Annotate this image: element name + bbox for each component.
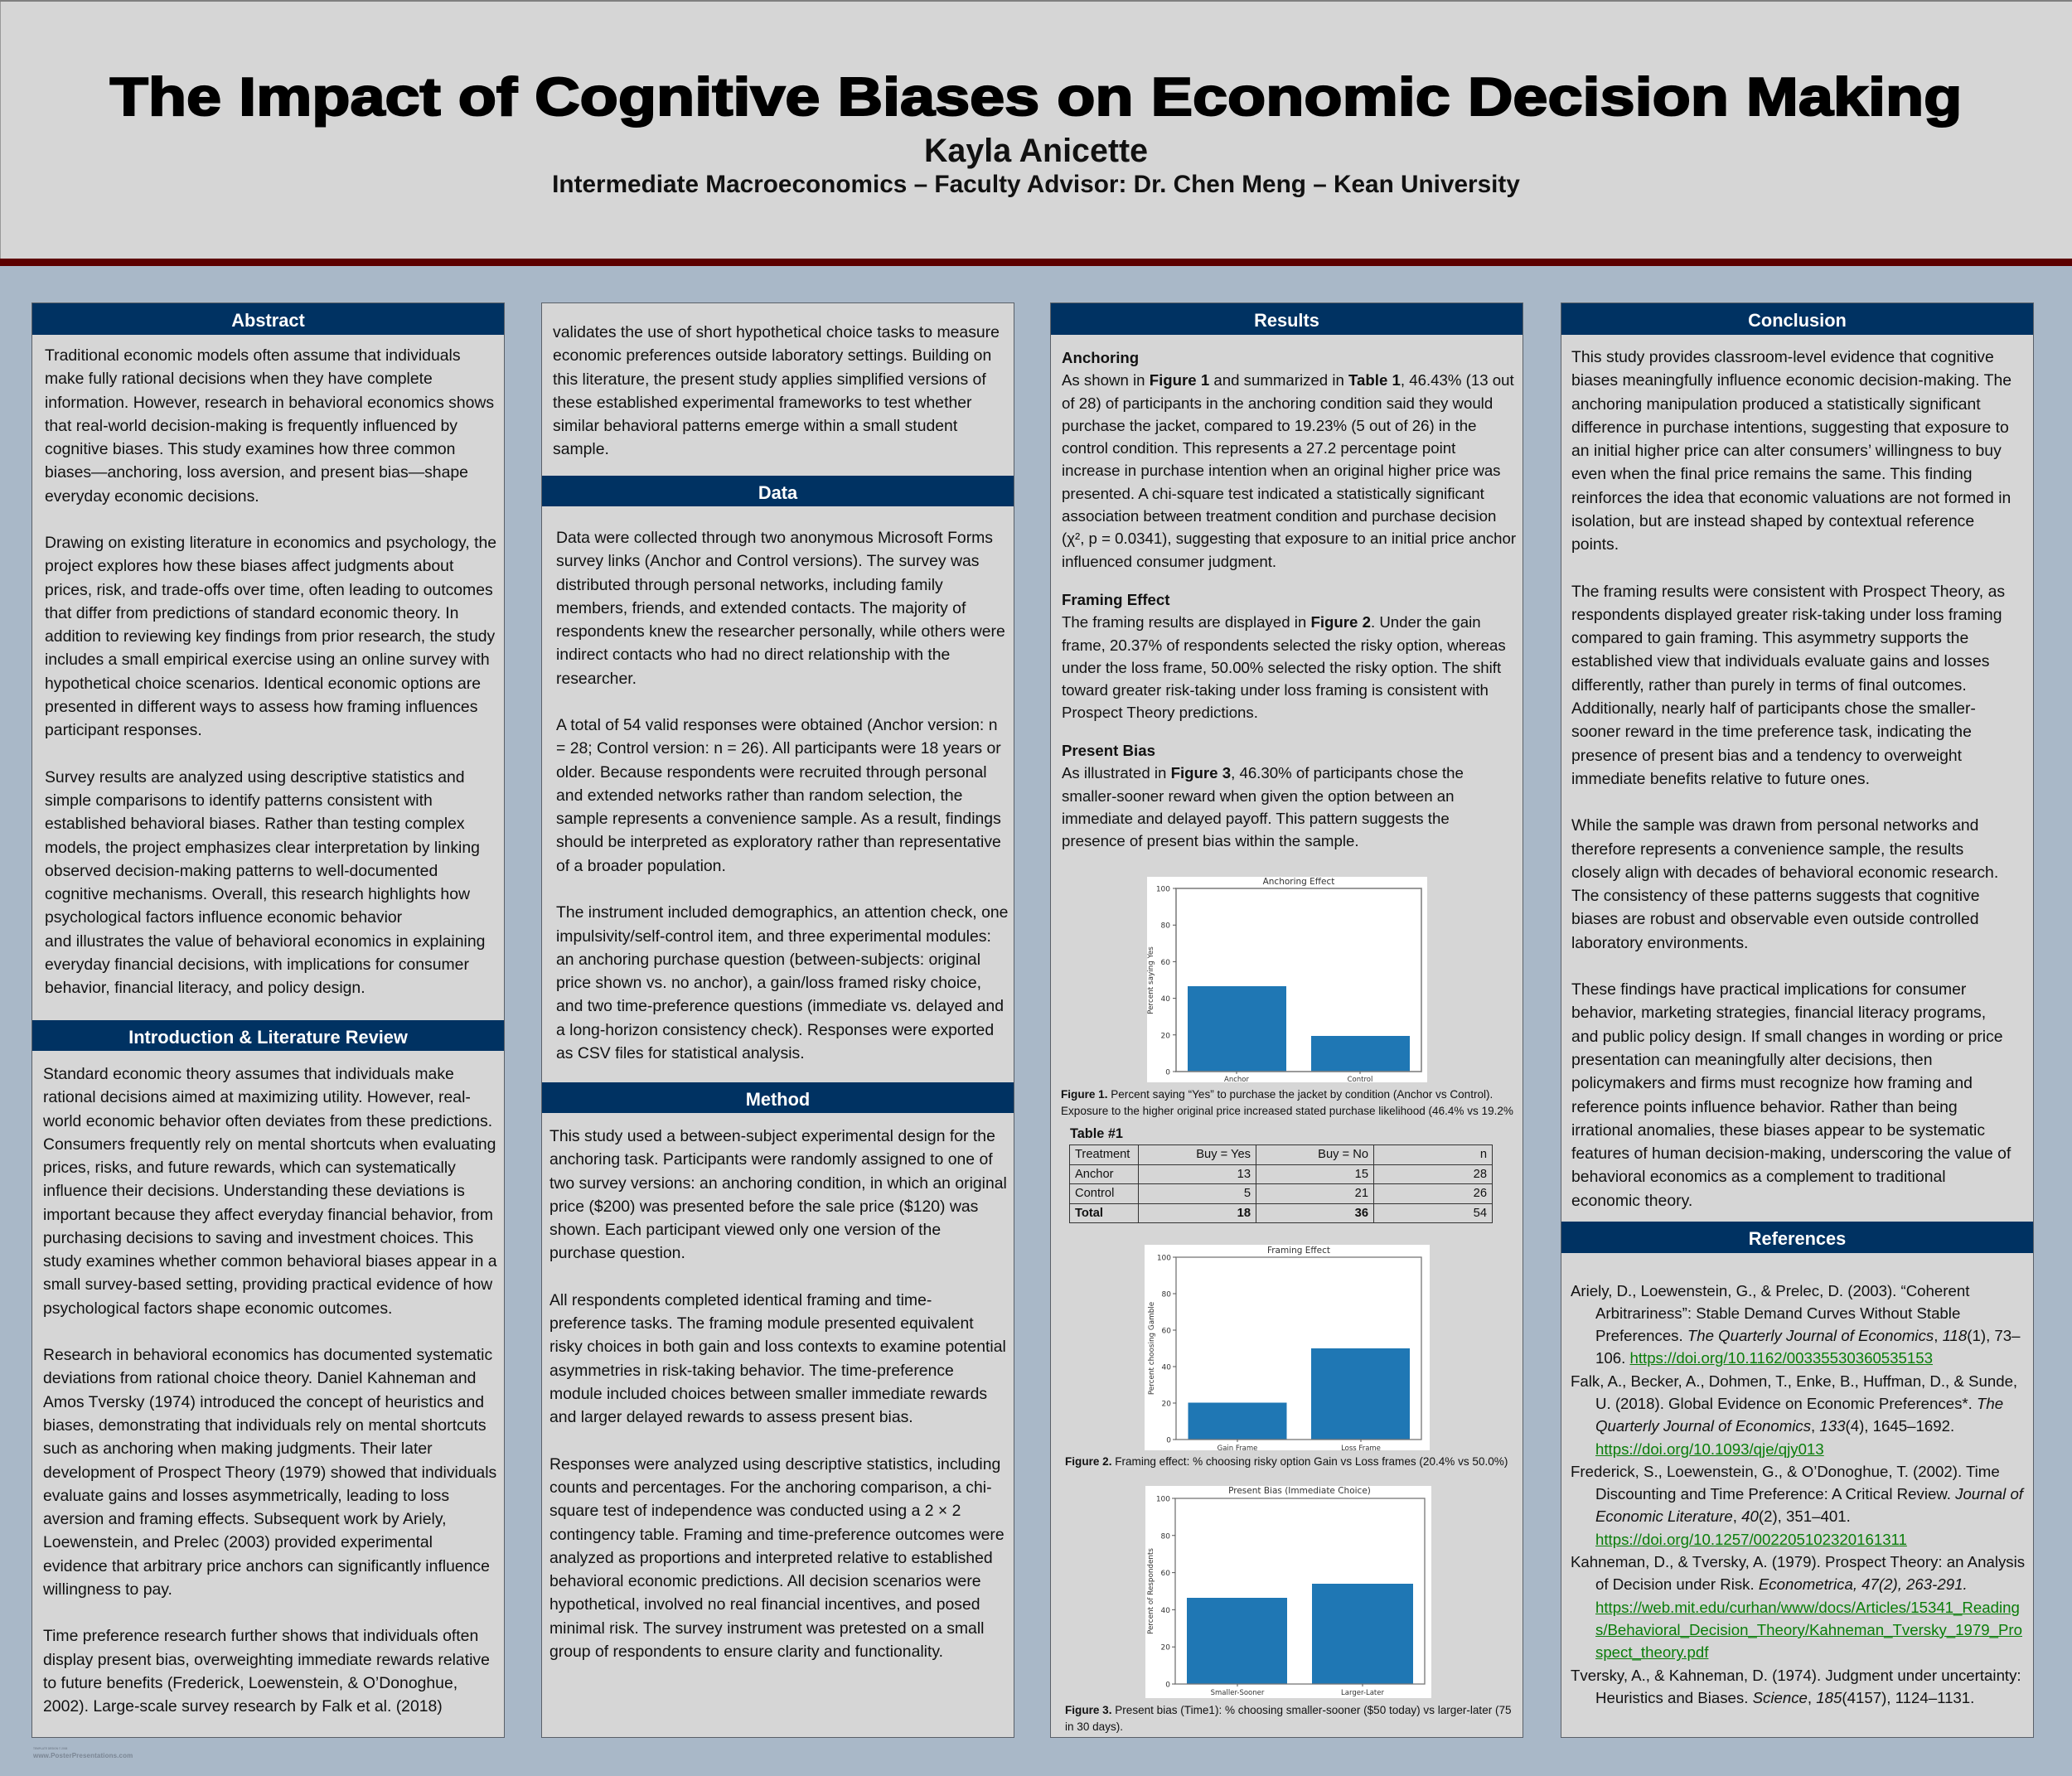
bar chart: present bias: 40 <box>1161 1607 1170 1615</box>
text: framing findings: Prospect Theory predictions. <box>1062 704 1258 721</box>
heading: Method: Method <box>746 1089 810 1110</box>
text: abstract: and illustrates the value of behavioral economics in explaining <box>45 932 485 951</box>
bar chart: present bias: 80 <box>1161 1532 1170 1541</box>
heading: Abstract <box>32 303 504 335</box>
text: literature review continued: economic preferences outside laboratory settings. Building on <box>553 346 991 365</box>
text: literature review continued: similar behavioral patterns emerge within a small student <box>553 417 957 435</box>
text: data <box>556 529 1008 1062</box>
text: abstract: everyday financial decisions, with implications for consumer <box>45 956 469 974</box>
text: data: a long-horizon consistency check). Responses were exported <box>556 1021 994 1039</box>
text: references: Economic Literature, 40(2), 351–401. <box>1595 1507 1851 1525</box>
text: introduction: world economic behavior often deviates from these predictions. <box>43 1112 492 1130</box>
text: method: hypothetical, involved no real financial incentives, and posed <box>549 1595 980 1614</box>
text: literature review continued: these established experimental frameworks to test whether <box>553 394 971 412</box>
text: abstract: psychological factors influence economic behavior <box>45 908 402 927</box>
text: method: risky choices in both gain and loss contexts to examine potential <box>549 1338 1006 1356</box>
text: references: spect_theory.pdf <box>1595 1643 1708 1661</box>
text: framing findings: frame, 20.37% of respondents selected the risky option, whereas <box>1062 636 1506 654</box>
text: data: older. Because respondents were recruited through personal <box>556 763 987 782</box>
text: conclusion: biases are robust and observable even outside controlled <box>1571 910 1979 928</box>
text: abstract: simple comparisons to identify patterns consistent with <box>45 791 433 810</box>
text: conclusion: immediate benefits relative to future ones. <box>1571 770 1870 788</box>
text: conclusion: behavior, marketing strategies, financial literacy programs, <box>1571 1004 1986 1022</box>
text: conclusion: difference in purchase intentions, suggesting that exposure to <box>1571 419 2009 437</box>
bar chart: present bias: 0 <box>1165 1681 1170 1689</box>
bar chart: framing effect <box>1145 1245 1430 1450</box>
text: abstract: models, the project emphasizes clear interpretation by linking <box>45 839 480 857</box>
text: conclusion: The framing results were consistent with Prospect Theory, as <box>1571 583 2005 601</box>
text: introduction: 2002). Large-scale survey research by Falk et al. (2018) <box>43 1697 443 1716</box>
bar chart: present bias: Percent of Respondents <box>1147 1548 1155 1634</box>
text: method: group of respondents to ensure clarity and functionality. <box>549 1643 943 1661</box>
heading: Data: Data <box>758 482 797 503</box>
text: method: asymmetries in risk-taking behavior. The time-preference <box>549 1362 954 1380</box>
text: data: impulsivity/self-control item, and three experimental modules: <box>556 927 991 946</box>
text: method: anchoring task. Participants were randomly assigned to one of <box>549 1150 993 1169</box>
text: anchoring findings: purchase the jacket, compared to 19.23% (5 out of 26) in the <box>1062 417 1477 434</box>
text: introduction: development of Prospect Theory (1979) showed that individuals <box>43 1464 496 1482</box>
bar chart: framing effect: 0 <box>1166 1437 1171 1445</box>
text: data: an anchoring purchase question (between-subjects: original <box>556 951 980 969</box>
text: method <box>549 1127 1007 1661</box>
bar chart: present bias: Present Bias (Immediate Choice) <box>1228 1486 1371 1496</box>
text: introduction: prices, risks, and future rewards, which can systematically <box>43 1159 456 1177</box>
text: abstract: cognitive biases. This study examines how three common <box>45 440 455 458</box>
text: data: Data were collected through two anonymous Microsoft Forms <box>556 529 993 547</box>
text: framing findings: The framing results are displayed in Figure 2. Under the gain <box>1062 613 1481 631</box>
text: references: Discounting and Time Preference: A Critical Review. Journal of <box>1595 1485 2023 1503</box>
text: present bias findings: As illustrated in Figure 3, 46.30% of participants chose the <box>1062 764 1464 782</box>
text: conclusion: policymakers and firms must recognize how framing and <box>1571 1074 1973 1092</box>
text: conclusion: therefore represents a convenience sample, the results <box>1571 840 1963 859</box>
text: anchoring findings: increase in purchase intention when an original higher price was <box>1062 462 1501 479</box>
text: introduction: Loewenstein, and Prelec (2003) provided experimental <box>43 1533 433 1551</box>
text: method: module included choices between smaller immediate rewards <box>549 1385 987 1403</box>
text: data: researcher. <box>556 670 637 688</box>
text: data: = 28; Control version: n = 26). All participants were 18 years or <box>556 739 1001 757</box>
heading: References <box>1561 1222 2033 1253</box>
caption: figure 1 <box>1061 1088 1513 1117</box>
text: present bias findings: presence of present bias within the sample. <box>1062 832 1359 849</box>
text: data: respondents knew the researcher personally, while others were <box>556 622 1005 641</box>
text: abstract: Survey results are analyzed using descriptive statistics and <box>45 768 465 786</box>
text: references: Frederick, S., Loewenstein, G., & O’Donoghue, T. (2002). Time <box>1571 1463 2000 1480</box>
bar chart: framing effect: 80 <box>1162 1291 1171 1299</box>
text: data: A total of 54 valid responses were obtained (Anchor version: n <box>556 716 997 734</box>
heading: Conclusion: Conclusion <box>1748 310 1847 331</box>
text: references <box>1571 1281 2025 1706</box>
footer credit: TEMPLATE DESIGN © 2008 <box>33 1747 67 1750</box>
bar chart: present bias <box>1145 1486 1431 1698</box>
text: references: https://doi.org/10.1257/002205102320161311 <box>1595 1531 1907 1548</box>
text: conclusion: presence of present bias and a tendency to overweight <box>1571 747 1962 765</box>
text: data: and two time-preference questions (immediate vs. delayed and <box>556 997 1004 1015</box>
text: abstract: Drawing on existing literature in economics and psychology, the <box>45 534 496 552</box>
heading: Conclusion <box>1561 303 2033 335</box>
text: anchoring findings <box>1062 349 1516 570</box>
text: introduction <box>43 1065 497 1716</box>
table: contingency table: 18 <box>1237 1207 1251 1220</box>
text: references: Kahneman, D., & Tversky, A. (1979). Prospect Theory: an Analysis <box>1571 1553 2025 1570</box>
table: contingency table: Buy = Yes <box>1196 1148 1251 1161</box>
text: data: indirect contacts who had no direct relationship with the <box>556 646 950 664</box>
text: abstract: project explores how these biases affect judgments about <box>45 557 453 575</box>
caption: figure 2: Figure 2. Framing effect: % choosing risky option Gain vs Loss frames (20.4% vs 50.0%) <box>1065 1455 1508 1468</box>
bar chart: anchoring effect: 100 <box>1156 885 1170 893</box>
text: data: distributed through personal networks, including family <box>556 576 943 594</box>
text: conclusion: isolation, but are instead shaped by contextual reference <box>1571 512 1974 530</box>
text: abstract: prices, risk, and trade-offs over time, often leading to outcomes <box>45 581 493 599</box>
text: conclusion: even when the final price remains the same. This finding <box>1571 465 1973 483</box>
text: introduction: Amos Tversky (1974) introduced the concept of heuristics and <box>43 1393 484 1411</box>
text: introduction: Time preference research further shows that individuals often <box>43 1627 478 1645</box>
text: abstract: hypothetical choice scenarios. Identical economic options are <box>45 675 481 693</box>
author: Kayla Anicette <box>924 133 1148 169</box>
text: data: survey links (Anchor and Control versions). The survey was <box>556 552 979 570</box>
text: references: s/Behavioral_Decision_Theory/Kahneman_Tversky_1979_Pro <box>1595 1621 2022 1638</box>
text: conclusion: reference points influence behavior. Rather than being <box>1571 1097 1958 1115</box>
table title: Table #1 <box>1070 1126 1123 1141</box>
text: introduction: small survey-based setting, providing practical evidence of how <box>43 1275 492 1294</box>
text: method: counts and percentages. For the anchoring comparison, a chi- <box>549 1478 992 1497</box>
text: present bias findings: Present Bias <box>1062 742 1155 759</box>
text: method: contingency table. Framing and time-preference outcomes were <box>549 1526 1005 1544</box>
text: introduction: purchasing decisions to saving and investment choices. This <box>43 1229 473 1247</box>
text: data: of a broader population. <box>556 857 726 875</box>
title: The Impact of Cognitive Biases on Economic Decision Making <box>110 66 1962 127</box>
text: references: Preferences. The Quarterly Journal of Economics, 118(1), 73– <box>1595 1327 2021 1344</box>
bar chart: anchoring effect: 60 <box>1161 959 1170 967</box>
text: introduction: important because they affect everyday financial behavior, from <box>43 1206 493 1224</box>
text: anchoring findings: Anchoring <box>1062 349 1139 366</box>
text: introduction: deviations from rational choice theory. Daniel Kahneman and <box>43 1369 476 1387</box>
text: method: behavioral economic predictions. All decision scenarios were <box>549 1572 981 1590</box>
bar chart: framing effect: Framing Effect <box>1267 1246 1330 1256</box>
text: framing findings: Framing Effect <box>1062 591 1170 608</box>
text: conclusion: laboratory environments. <box>1571 934 1748 952</box>
bar chart: present bias: 20 <box>1161 1644 1170 1653</box>
text: conclusion: respondents displayed greater risk-taking under loss framing <box>1571 606 2002 624</box>
text: references: Quarterly Journal of Economics, 133(4), 1645–1692. <box>1595 1417 1954 1435</box>
heading: Results <box>1051 303 1523 335</box>
text: literature review continued: validates the use of short hypothetical choice tasks to measure <box>553 323 1000 341</box>
text: anchoring findings: association between treatment condition and purchase decision <box>1062 507 1496 525</box>
text: abstract: Traditional economic models often assume that individuals <box>45 346 461 365</box>
text: conclusion: These findings have practical implications for consumer <box>1571 980 1966 999</box>
panel: results <box>1051 303 1523 1737</box>
bar chart: framing effect: 100 <box>1157 1255 1171 1263</box>
text: references: Heuristics and Biases. Science, 185(4157), 1124–1131. <box>1595 1689 1974 1706</box>
text: abstract: everyday economic decisions. <box>45 487 259 506</box>
caption: figure 3: in 30 days). <box>1065 1720 1123 1733</box>
table: contingency table: 5 <box>1244 1187 1251 1200</box>
text: abstract: observed decision-making patterns to well-documented <box>45 862 438 880</box>
text: abstract: information. However, research in behavioral economics shows <box>45 394 494 412</box>
text: introduction: to future benefits (Frederick, Loewenstein, & O’Donoghue, <box>43 1674 457 1692</box>
text: conclusion: While the sample was drawn from personal networks and <box>1571 816 1978 835</box>
text: method: shown. Each participant viewed only one version of the <box>549 1221 941 1239</box>
text: conclusion: The consistency of these patterns suggests that cognitive <box>1571 887 1980 905</box>
bar chart: framing effect: 20 <box>1162 1401 1171 1409</box>
text: conclusion: reinforces the idea that economic valuations are not formed in <box>1571 489 2011 507</box>
panel: column 4 <box>1561 303 2033 1737</box>
bar chart: anchoring effect: 0 <box>1165 1069 1170 1077</box>
text: anchoring findings: (χ², p = 0.0341), suggesting that exposure to an initial price anchor <box>1062 530 1516 547</box>
text: abstract <box>45 346 496 997</box>
text: references: Arbitrariness”: Stable Demand Curves Without Stable <box>1595 1304 1960 1322</box>
text: introduction: study examines whether common behavioral biases appear in a <box>43 1252 497 1270</box>
table: contingency table: Control <box>1075 1187 1114 1200</box>
text: introduction: biases, demonstrating that individuals rely on mental shortcuts <box>43 1416 487 1435</box>
text: introduction: evidence that arbitrary price anchors can significantly influence <box>43 1557 490 1575</box>
text: introduction: psychological factors shape economic outcomes. <box>43 1299 392 1318</box>
text: abstract: addition to reviewing key findings from prior research, the study <box>45 627 495 646</box>
text: abstract: includes a small empirical exercise using an online survey with <box>45 651 490 669</box>
text: conclusion: biases meaningfully influence economic decision-making. The <box>1571 371 2011 390</box>
text: present bias findings: smaller-sooner reward when given the option between an <box>1062 787 1455 805</box>
text: conclusion: economic theory. <box>1571 1192 1692 1210</box>
text: references: of Decision under Risk. Econometrica, 47(2), 263-291. <box>1595 1575 1968 1593</box>
text: introduction: evaluate gains and losses asymmetrically, leading to loss <box>43 1487 449 1505</box>
text: conclusion <box>1571 348 2011 1210</box>
caption: figure 1: Figure 1. Percent saying “Yes” to purchase the jacket by condition (Anchor vs Control). <box>1061 1088 1493 1101</box>
text: references: 106. https://doi.org/10.1162/00335530360535153 <box>1595 1349 1933 1367</box>
text: introduction: influence their decisions. Understanding these deviations is <box>43 1182 465 1200</box>
text: anchoring findings: control condition. This represents a 27.2 percentage point <box>1062 439 1455 457</box>
text: conclusion: anchoring manipulation produced a statistically significant <box>1571 395 1981 414</box>
text: introduction: display present bias, overweighting immediate rewards relative <box>43 1651 490 1669</box>
text: conclusion: an initial higher price can alter consumers’ willingness to buy <box>1571 442 2002 460</box>
text: method: two survey versions: an anchoring condition, in which an original <box>549 1174 1007 1193</box>
text: literature review continued: this literature, the present study applies simplified versions of <box>553 370 986 389</box>
table: contingency table: 26 <box>1474 1187 1487 1200</box>
text: abstract: presented in different ways to assess how framing influences <box>45 698 477 716</box>
text: anchoring findings: As shown in Figure 1 and summarized in Table 1, 46.43% (13 out <box>1062 371 1514 389</box>
text: method: Responses were analyzed using descriptive statistics, including <box>549 1455 1000 1474</box>
panel: column 1 <box>32 303 504 1737</box>
table: contingency table: 28 <box>1474 1168 1487 1181</box>
text: conclusion: points. <box>1571 535 1619 554</box>
text: present bias findings: immediate and delayed payoff. This pattern suggests the <box>1062 810 1450 827</box>
text: method: square test of independence was conducted using a 2 × 2 <box>549 1502 961 1520</box>
text: abstract: cognitive mechanisms. Overall, this research highlights how <box>45 885 470 903</box>
table: contingency table: Total <box>1075 1207 1103 1220</box>
text: references: Tversky, A., & Kahneman, D. (1974). Judgment under uncertainty: <box>1571 1667 2021 1684</box>
text: present bias findings <box>1062 742 1464 849</box>
text: data: sample represents a convenience sample. As a result, findings <box>556 810 1001 828</box>
text: abstract: make fully rational decisions when they have complete <box>45 370 433 388</box>
text: conclusion: behavioral economics as a complement to traditional <box>1571 1168 1946 1186</box>
footer credit <box>33 1747 133 1759</box>
footer credit: www.PosterPresentations.com <box>33 1752 133 1759</box>
table: contingency table: Anchor <box>1075 1168 1114 1181</box>
bar chart: present bias: 100 <box>1156 1495 1170 1503</box>
table: contingency table: n <box>1480 1148 1487 1161</box>
text: introduction: Research in behavioral economics has documented systematic <box>43 1346 492 1364</box>
text: conclusion: Additionally, nearly half of participants chose the smaller- <box>1571 699 1976 718</box>
text: method: preference tasks. The framing module presented equivalent <box>549 1314 974 1333</box>
text: conclusion: differently, rather than purely in terms of final outcomes. <box>1571 676 1967 694</box>
bar chart: anchoring effect <box>1147 877 1427 1082</box>
poster header <box>0 0 2072 259</box>
text: conclusion: compared to gain framing. This asymmetry supports the <box>1571 629 1968 647</box>
text: method: This study used a between-subject experimental design for the <box>549 1127 995 1145</box>
text: conclusion: and public policy design. If small changes in wording or price <box>1571 1028 2003 1046</box>
text: abstract: biases—anchoring, loss aversion, and present bias—shape <box>45 463 468 482</box>
text: method: and larger delayed rewards to assess present bias. <box>549 1408 913 1426</box>
text: anchoring findings: presented. A chi-square test indicated a statistically significant <box>1062 485 1484 502</box>
text: method: All respondents completed identical framing and time- <box>549 1291 932 1309</box>
header divider band <box>0 259 2072 266</box>
text: data: price shown vs. no anchor), a gain/loss framed risky choice, <box>556 974 981 992</box>
table: contingency table: 15 <box>1355 1168 1368 1181</box>
text: framing findings: toward greater risk-taking under loss framing is consistent with <box>1062 681 1489 699</box>
heading: Data <box>542 476 1014 506</box>
bar chart: anchoring effect: 20 <box>1161 1032 1170 1040</box>
text: conclusion: sooner reward in the time preference task, indicating the <box>1571 723 1972 741</box>
text: abstract: established behavioral biases. Rather than testing complex <box>45 815 465 833</box>
text: conclusion: features of human decision-making, underscoring the value of <box>1571 1144 2011 1163</box>
text: abstract: that real-world decision-making is frequently influenced by <box>45 417 457 435</box>
text: introduction: aversion and framing effects. Subsequent work by Ariely, <box>43 1510 446 1528</box>
text: introduction: Consumers frequently rely on mental shortcuts when evaluating <box>43 1135 496 1154</box>
affiliation line: Intermediate Macroeconomics – Faculty Advisor: Dr. Chen Meng – Kean University <box>552 171 1520 198</box>
text: conclusion: established view that individuals evaluate gains and losses <box>1571 652 1989 670</box>
table: contingency table: 21 <box>1355 1187 1368 1200</box>
text: literature review continued: sample. <box>553 440 609 458</box>
caption: figure 3: Figure 3. Present bias (Time1): % choosing smaller-sooner ($50 today) vs larger-later (75 <box>1065 1704 1512 1716</box>
text: conclusion: irrational anomalies, these biases appear to be systematic <box>1571 1121 1985 1140</box>
text: framing findings <box>1062 591 1506 721</box>
heading: Introduction & Literature Review <box>32 1020 504 1051</box>
heading: Results: Results <box>1254 310 1319 331</box>
bar chart: present bias: Larger-Later <box>1341 1689 1384 1697</box>
text: method: purchase question. <box>549 1244 685 1262</box>
bar chart: present bias: 60 <box>1161 1570 1170 1578</box>
text: method: minimal risk. The survey instrument was pretested on a small <box>549 1619 984 1638</box>
bar chart: framing effect: 40 <box>1162 1364 1171 1372</box>
text: introduction: Standard economic theory assumes that individuals make <box>43 1065 454 1083</box>
text: conclusion: This study provides classroom-level evidence that cognitive <box>1571 348 1994 366</box>
bar chart: anchoring effect: 40 <box>1161 995 1170 1004</box>
text: references: Falk, A., Becker, A., Dohmen, T., Enke, B., Huffman, D., & Sunde, <box>1571 1372 2017 1390</box>
caption: figure 1: Exposure to the higher original price increased stated purchase likelihood (46.4% vs 19.2% <box>1061 1105 1513 1117</box>
bar chart: anchoring effect: Percent saying Yes <box>1147 946 1155 1014</box>
text: conclusion: closely align with decades of behavioral economic research. <box>1571 864 1998 882</box>
text: data: as CSV files for statistical analysis. <box>556 1044 805 1062</box>
table: contingency table: 13 <box>1237 1168 1251 1181</box>
text: framing findings: under the loss frame, 50.00% selected the risky option. The shift <box>1062 659 1501 676</box>
text: abstract: that differ from predictions of standard economic theory. In <box>45 604 458 622</box>
text: abstract: behavior, financial literacy, and policy design. <box>45 979 366 997</box>
heading: Abstract: Abstract <box>231 310 305 331</box>
heading: Introduction & Literature Review: Introduction & Literature Review <box>128 1027 408 1048</box>
text: introduction: rational decisions aimed at maximizing utility. However, real- <box>43 1088 471 1106</box>
bar chart: anchoring effect: 80 <box>1161 922 1170 931</box>
caption: figure 3 <box>1065 1704 1512 1733</box>
bar chart: anchoring effect: Anchoring Effect <box>1263 877 1334 887</box>
text: introduction: such as anchoring when making judgments. Their later <box>43 1440 433 1458</box>
bar chart: framing effect: Percent choosing Gamble <box>1148 1302 1156 1395</box>
text: method: analyzed as proportions and interpreted relative to established <box>549 1549 993 1567</box>
text: introduction: willingness to pay. <box>43 1580 172 1599</box>
heading: Method <box>542 1082 1014 1113</box>
text: references: https://web.mit.edu/curhan/www/docs/Articles/15341_Reading <box>1595 1599 2020 1616</box>
text: data: and extended networks rather than random selection, the <box>556 786 962 805</box>
bar chart: present bias: Smaller-Sooner <box>1211 1689 1265 1697</box>
table: contingency table: 54 <box>1474 1207 1487 1220</box>
text: literature review continued <box>553 323 1000 458</box>
table: contingency table: Buy = No <box>1318 1148 1368 1161</box>
heading: References: References <box>1749 1228 1846 1249</box>
text: anchoring findings: influenced consumer judgment. <box>1062 553 1276 570</box>
text: data: The instrument included demographics, an attention check, one <box>556 903 1008 922</box>
text: anchoring findings: of 28) of participants in the anchoring condition said they would <box>1062 394 1493 412</box>
panel: column 2 <box>542 303 1014 1737</box>
table: contingency table <box>1069 1144 1493 1223</box>
text: method: price ($200) was presented before the sale price ($120) was <box>549 1198 978 1216</box>
text: references: Ariely, D., Loewenstein, G., & Prelec, D. (2003). “Coherent <box>1571 1281 1969 1299</box>
bar chart: framing effect: 60 <box>1162 1328 1171 1336</box>
text: data: should be interpreted as exploratory rather than representative <box>556 833 1001 851</box>
text: conclusion: presentation can meaningfully alter decisions, then <box>1571 1051 1932 1069</box>
table: contingency table: 36 <box>1355 1207 1368 1220</box>
text: abstract: participant responses. <box>45 721 202 739</box>
table: contingency table: Treatment <box>1075 1148 1130 1161</box>
text: references: https://doi.org/10.1093/qje/qjy013 <box>1595 1440 1824 1458</box>
text: references: U. (2018). Global Evidence on Economic Preferences*. The <box>1595 1395 2003 1412</box>
text: data: members, friends, and extended contacts. The majority of <box>556 599 966 617</box>
